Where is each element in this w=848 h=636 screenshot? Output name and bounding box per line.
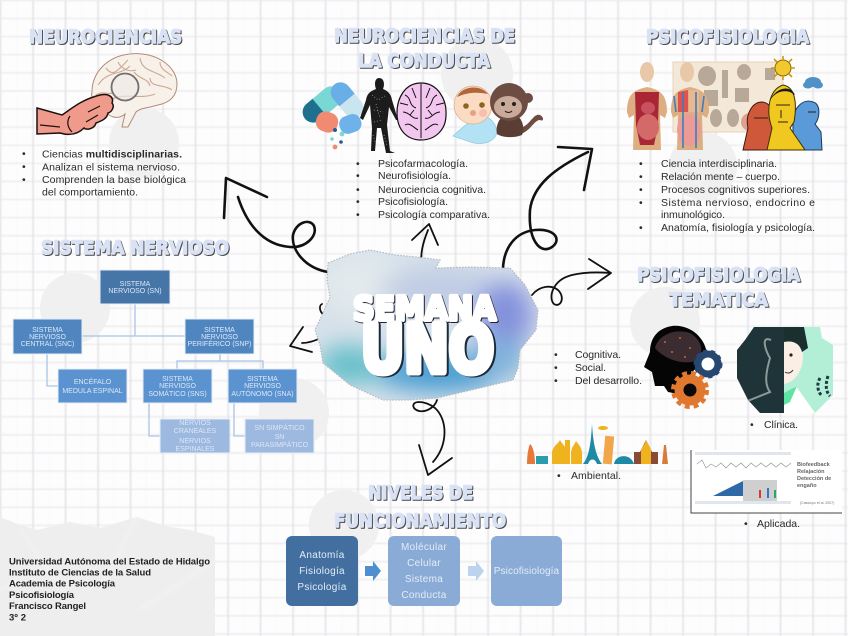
text block: conducta bullets: • (356, 184, 360, 196)
panel: neurociencias de la conducta (298, 25, 543, 221)
central watercolor blob with title (310, 245, 545, 405)
org chart labels: AUTÓNOMO (SNA) (231, 389, 294, 398)
box: psicofisiologia (491, 536, 562, 606)
text block: neurociencias bullets: • (22, 161, 26, 173)
icon: red, yellow and blue faces (743, 85, 822, 150)
text block: aplicada: • (744, 518, 748, 530)
icon: monkey (490, 83, 543, 137)
arrow: to psicofisiologia tematica (532, 259, 611, 305)
arrow: to neurociencias de la conducta (412, 224, 438, 268)
text block: tematica bullets: • (554, 375, 558, 387)
heading: niveles de funcionamiento (334, 482, 506, 532)
arrow: to neurociencias (224, 178, 328, 272)
org chart labels: CENTRAL (SNC) (21, 341, 74, 348)
text block: psicofisiologia bullets: Ciencia interdisciplinaria. (661, 158, 777, 170)
org chart boxes (13, 270, 314, 453)
org chart labels: SISTEMA (162, 376, 193, 383)
box: anatomia fisiologia psicologia: Fisiología (299, 566, 345, 577)
image: biofeedback screenshot: Relajación (797, 469, 825, 475)
illustration: split face, clinica (737, 327, 833, 413)
text block: conducta bullets: Psicología comparativa. (378, 209, 490, 221)
panel: institutional credits on crumpled paper (0, 517, 215, 636)
org chart labels: SOMÁTICO (SNS) (148, 389, 207, 398)
box: anatomia fisiologia psicologia: Psicología (297, 582, 347, 593)
org chart labels: PERIFÉRICO (SNP) (188, 339, 251, 348)
text block: psicofisiologia bullets: inmunológico. (661, 209, 725, 221)
heading: psicofisiologia tematica: TEMATICA (669, 289, 768, 311)
text block: tematica bullets: • (750, 419, 754, 431)
icon: sun and storm cloud (771, 56, 823, 88)
icon: anatomy figures (627, 62, 709, 150)
text block: psicofisiologia bullets: • (639, 184, 643, 196)
org chart labels: ENCÉFALO (74, 377, 112, 386)
text block: psicofisiologia bullets: Anatomía, fisiología y psicología. (661, 222, 815, 234)
credits text (9, 556, 210, 624)
text block: neurociencias bullets: • (22, 148, 26, 160)
heading: psicofisiologia: PSICOFISIOLOGIA (646, 26, 809, 48)
text block: ambiental: • (557, 470, 561, 482)
text block: tematica bullets: • (554, 349, 558, 361)
org chart labels (21, 281, 309, 453)
org chart connectors (47, 304, 263, 436)
text block: tematica bullets: Cognitiva. (575, 349, 621, 361)
image: biofeedback screenshot: Detección de (797, 476, 831, 482)
box: psicofisiologia: Psicofisiología (494, 566, 560, 577)
org chart labels: NERVIOSO (244, 383, 281, 390)
icon: head with gears (644, 326, 721, 407)
image: biofeedback screenshot: (Cassiopo et al. 2007) (800, 501, 834, 505)
org chart labels: SISTEMA (247, 376, 278, 383)
arrow: to sistema nervioso (290, 304, 326, 352)
decorative grey circles (40, 38, 737, 560)
text block: psicofisiologia bullets: Relación mente – cuerpo. (661, 171, 780, 183)
arrow: to niveles de funcionamiento (413, 400, 452, 475)
credits text: Francisco Rangel (9, 601, 86, 612)
text block: psicofisiologia bullets: • (639, 158, 643, 170)
heading: neurociencias: NEUROCIENCIAS (29, 26, 182, 48)
org chart labels: NERVIOSO (159, 383, 196, 390)
text block: neurociencias bullets: del comportamiento. (42, 186, 138, 198)
org chart labels: SN SIMPÁTICO (254, 423, 305, 432)
org chart labels: NERVIOSO (SN) (108, 288, 162, 295)
heading: psicofisiologia tematica: PSICOFISIOLOGIA (637, 264, 800, 286)
illustration: city landmarks skyline (527, 424, 668, 464)
org chart labels: PARASIMPÁTICO (251, 440, 309, 449)
org chart labels: SISTEMA (204, 327, 235, 334)
text block: conducta bullets: Psicofisiología. (378, 196, 448, 208)
image: biofeedback screenshot: engaño (797, 483, 817, 489)
heading: neurociencias de la conducta (334, 25, 515, 72)
icon: orange gear (673, 373, 707, 407)
text block: tematica bullets: • (554, 362, 558, 374)
panel: niveles de funcionamiento (286, 482, 562, 606)
heading: neurociencias de la conducta: LA CONDUCTA (358, 50, 490, 72)
box: molecular celular sistema conducta: Molécular (401, 542, 447, 553)
text block: tematica bullets (554, 349, 798, 431)
arrow: light step (468, 561, 484, 581)
icon: blue gear (695, 351, 721, 377)
text block: psicofisiologia bullets: • (639, 197, 643, 209)
credits text: Psicofisiología (9, 590, 75, 601)
org chart labels: SISTEMA (120, 281, 151, 288)
text block: psicofisiologia bullets: Sistema nervioso, endocrino e (661, 197, 815, 209)
org chart labels: SN (275, 434, 284, 441)
panel: sistema nervioso (13, 237, 314, 453)
box: molecular celular sistema conducta (388, 536, 460, 606)
text block: neurociencias bullets: Comprenden la base biológica (42, 174, 186, 186)
central title: semana uno: SEMANA (353, 289, 496, 328)
heading: neurociencias de la conducta: NEUROCIENCIAS DE (334, 25, 515, 47)
box: molecular celular sistema conducta: Celular (407, 558, 441, 569)
text block: conducta bullets (356, 158, 490, 221)
org chart labels: NERVIOSO (201, 334, 238, 341)
text block: psicofisiologia bullets: Procesos cognitivos superiores. (661, 184, 810, 196)
org chart labels: NERVIOS (179, 438, 211, 445)
org chart labels: SISTEMA (32, 327, 63, 334)
image: anatomical poster (673, 62, 783, 132)
icon: pills (298, 78, 368, 149)
text block: conducta bullets: Neurociencia cognitiva. (378, 184, 486, 196)
text block: aplicada: Aplicada. (757, 518, 800, 530)
text block: tematica bullets: Social. (575, 362, 606, 374)
arrow: to psicofisiologia (503, 147, 592, 268)
text block: psicofisiologia bullets: • (639, 222, 643, 234)
box: molecular celular sistema conducta: Sistema (405, 574, 443, 585)
text block: ambiental: Ambiental. (571, 470, 621, 482)
box: molecular celular sistema conducta: Conducta (401, 590, 447, 601)
org chart labels: ESPINALES (176, 446, 215, 453)
text block: psicofisiologia bullets (639, 158, 815, 234)
heading: niveles de funcionamiento: FUNCIONAMIENTO (334, 510, 506, 532)
org chart labels: CRANEALES (174, 428, 217, 435)
image: biofeedback screenshot: Biofeedback (797, 462, 831, 468)
crumpled paper (0, 517, 215, 636)
text block: conducta bullets: • (356, 209, 360, 221)
credits text: Academia de Psicología (9, 578, 116, 590)
org chart labels: NERVIOS (179, 420, 211, 427)
image: biofeedback screenshot (691, 450, 842, 513)
text block: tematica bullets: Clínica. (764, 419, 798, 431)
credits text: 3º 2 (9, 612, 26, 624)
central title: semana uno: UNO (361, 311, 494, 388)
text block: neurociencias bullets (22, 148, 186, 198)
credits text: Universidad Autónoma del Estado de Hidalgo (9, 556, 210, 568)
text block: tematica bullets: Del desarrollo. (575, 375, 642, 387)
text block: neurociencias bullets: • (22, 174, 26, 186)
icon: brain under magnifier held by hand (37, 54, 177, 134)
text block: conducta bullets: • (356, 158, 360, 170)
text block: psicofisiologia bullets: • (639, 171, 643, 183)
arrow: blue step (365, 561, 381, 581)
credits text: Instituto de Ciencias de la Salud (9, 568, 151, 578)
box: anatomia fisiologia psicologia: Anatomía (299, 550, 345, 561)
heading: sistema nervioso: SISTEMA NERVIOSO (41, 237, 229, 259)
heading: niveles de funcionamiento: NIVELES DE (368, 482, 473, 504)
panel: neurociencias (22, 26, 186, 198)
icon: pink brain (397, 83, 446, 140)
text block: conducta bullets: • (356, 196, 360, 208)
watercolor splash (310, 245, 545, 405)
org chart labels: MEDULA ESPINAL (62, 388, 123, 395)
panel: psicofisiologia (627, 26, 823, 234)
central title: semana uno (353, 289, 496, 388)
heading: psicofisiologia tematica (637, 264, 800, 311)
text block: neurociencias bullets: Analizan el sistema nervioso. (42, 162, 180, 174)
text block: neurociencias bullets: Ciencias multidisciplinarias. (42, 148, 182, 160)
text block: conducta bullets: Neurofisiología. (378, 170, 451, 182)
icon: baby (453, 86, 497, 143)
panel: psicofisiologia tematica (527, 264, 842, 530)
text block: conducta bullets: • (356, 170, 360, 182)
box: anatomia fisiologia psicologia (286, 536, 358, 606)
org chart labels: NERVIOSO (29, 334, 66, 341)
icon: human body silhouette (360, 78, 398, 153)
text block: conducta bullets: Psicofarmacología. (378, 158, 468, 170)
